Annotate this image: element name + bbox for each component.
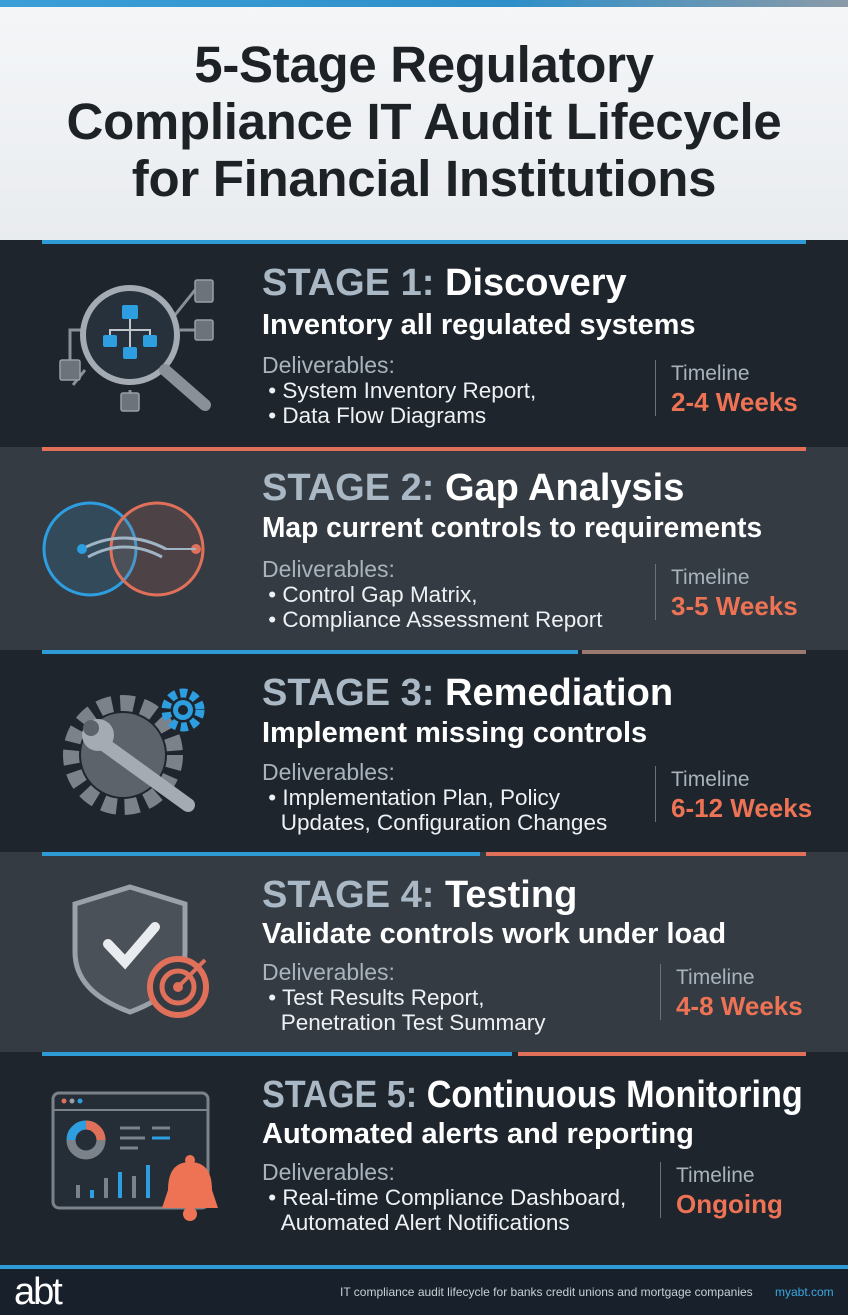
timeline stage 3: Timeline: [671, 768, 750, 791]
footer url: myabt.com: [775, 1285, 834, 1299]
deliverables stage 2: • Control Gap Matrix,: [268, 582, 477, 607]
subtitle stage 3: Implement missing controls: [262, 717, 647, 749]
subtitle stage 2: Map current controls to requirements: [262, 512, 762, 544]
subtitle stage 4: Validate controls work under load: [262, 918, 726, 950]
deliverables stage 1: [262, 352, 536, 428]
icon: dashboard bell: [52, 1092, 218, 1221]
timeline stage 4: [660, 964, 803, 1020]
deliverables stage 3: Deliverables:: [262, 759, 395, 785]
deliverables stage 2: Deliverables:: [262, 556, 395, 582]
panel: stage 3: [0, 650, 848, 852]
title: for Financial Institutions: [132, 150, 716, 207]
deliverables stage 3: [262, 759, 607, 835]
panel: stage 2: [0, 447, 848, 650]
timeline stage 5: Timeline: [676, 1164, 755, 1187]
panel: stage 5: [0, 1052, 848, 1265]
deliverables stage 3: Updates, Configuration Changes: [281, 810, 607, 835]
deliverables stage 4: Deliverables:: [262, 959, 395, 985]
header title area: [0, 0, 848, 240]
deliverables stage 1: Deliverables:: [262, 352, 395, 378]
deliverables stage 5: • Real-time Compliance Dashboard,: [268, 1185, 626, 1210]
panel: stage 4: [0, 852, 848, 1052]
logo: abt: [14, 1271, 61, 1313]
deliverables stage 1: • Data Flow Diagrams: [268, 403, 486, 428]
timeline stage 1: [655, 360, 798, 416]
deliverables stage 5: [262, 1159, 626, 1235]
deliverables stage 3: • Implementation Plan, Policy: [268, 785, 560, 810]
timeline stage 4: 4-8 Weeks: [676, 991, 803, 1021]
deliverables stage 1: • System Inventory Report,: [268, 378, 536, 403]
panel: stage 1: [0, 240, 848, 447]
icon: gears wrench: [63, 688, 204, 815]
timeline stage 4: Timeline: [676, 966, 755, 989]
title: 5-Stage Regulatory: [194, 36, 654, 93]
deliverables stage 2: • Compliance Assessment Report: [268, 607, 603, 632]
heading stage 3: STAGE 3: Remediation: [262, 672, 673, 714]
title: [67, 36, 781, 207]
timeline stage 2: 3-5 Weeks: [671, 591, 798, 621]
heading stage 5: STAGE 5: Continuous Monitoring: [262, 1074, 803, 1116]
top gradient bar: [0, 0, 848, 7]
timeline stage 5: [660, 1162, 783, 1218]
timeline stage 5: Ongoing: [676, 1189, 783, 1219]
timeline stage 1: 2-4 Weeks: [671, 387, 798, 417]
deliverables stage 4: [262, 959, 546, 1035]
deliverables stage 4: • Test Results Report,: [268, 985, 485, 1010]
heading stage 1: STAGE 1: Discovery: [262, 262, 627, 304]
deliverables stage 2: [262, 556, 603, 632]
timeline stage 3: 6-12 Weeks: [671, 793, 812, 823]
timeline stage 2: [655, 564, 798, 620]
footer: [0, 1265, 848, 1315]
title: Compliance IT Audit Lifecycle: [67, 93, 781, 150]
timeline stage 3: [655, 766, 812, 822]
deliverables stage 4: Penetration Test Summary: [281, 1010, 545, 1035]
subtitle stage 1: Inventory all regulated systems: [262, 309, 696, 341]
timeline stage 1: Timeline: [671, 362, 750, 385]
footer caption: IT compliance audit lifecycle for banks credit unions and mortgage companies: [340, 1285, 753, 1299]
timeline stage 2: Timeline: [671, 566, 750, 589]
subtitle stage 5: Automated alerts and reporting: [262, 1118, 694, 1150]
deliverables stage 5: Automated Alert Notifications: [281, 1210, 570, 1235]
heading stage 4: STAGE 4: Testing: [262, 874, 577, 916]
icon: venn bridge: [42, 502, 204, 596]
icon: magnifier network: [59, 279, 214, 412]
deliverables stage 5: Deliverables:: [262, 1159, 395, 1185]
icon: shield target: [72, 884, 209, 1018]
heading stage 2: STAGE 2: Gap Analysis: [262, 467, 684, 509]
